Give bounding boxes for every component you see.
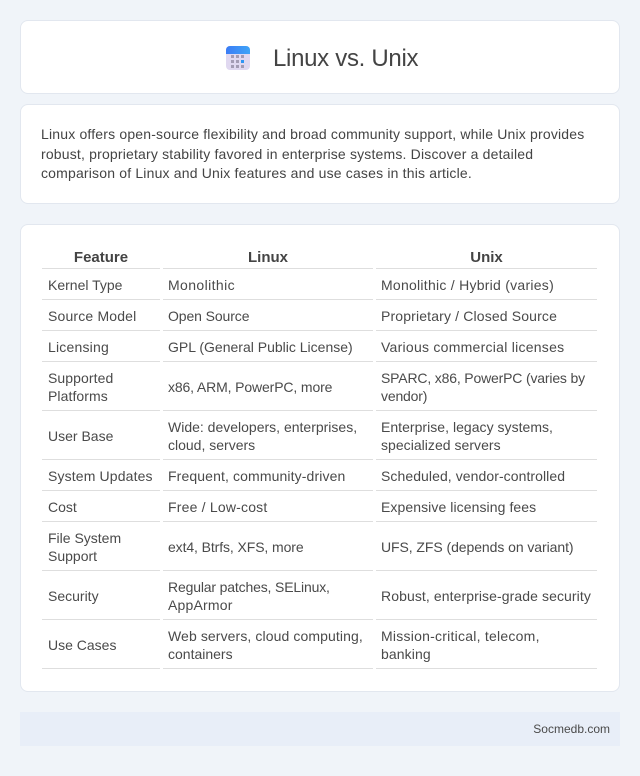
comparison table: Monolithic <box>168 277 235 293</box>
comparison table: Frequent, community-driven <box>168 468 345 484</box>
comparison table: Wide: developers, enterprises, <box>168 419 357 435</box>
comparison table: AppArmor <box>168 597 233 613</box>
footer credit: Socmedb.com <box>533 722 610 736</box>
comparison table: Platforms <box>48 388 108 404</box>
intro text: Linux offers open-source flexibility and broad community support, while Unix provides <box>41 126 584 142</box>
comparison table: Robust, enterprise-grade security <box>381 588 591 604</box>
comparison table: Enterprise, legacy systems, <box>381 419 553 435</box>
comparison table: containers <box>168 646 233 662</box>
comparison table: cloud, servers <box>168 437 255 453</box>
comparison table: Web servers, cloud computing, <box>168 628 363 644</box>
comparison table: Scheduled, vendor-controlled <box>381 468 565 484</box>
panel: comparison table card <box>20 224 620 692</box>
comparison table: Various commercial licenses <box>381 339 564 355</box>
comparison table: File System <box>48 530 121 546</box>
comparison table: Feature <box>74 249 128 266</box>
comparison table: Expensive licensing fees <box>381 499 536 515</box>
comparison table: Free / Low-cost <box>168 499 267 515</box>
comparison table: UFS, ZFS (depends on variant) <box>381 539 574 555</box>
title: Linux vs. Unix <box>273 45 418 72</box>
icon: calendar <box>226 46 250 70</box>
comparison table: Cost <box>48 499 77 515</box>
comparison table: Support <box>48 548 97 564</box>
comparison table: Source Model <box>48 308 136 324</box>
comparison table: vendor) <box>381 388 427 404</box>
panel: intro <box>20 104 620 204</box>
footer bar <box>20 712 620 746</box>
comparison table: Unix <box>470 249 503 266</box>
comparison table: Licensing <box>48 339 109 355</box>
comparison table: specialized servers <box>381 437 501 453</box>
intro text: comparison of Linux and Unix features and use cases in this article. <box>41 165 472 181</box>
comparison table: System Updates <box>48 468 153 484</box>
comparison table: Proprietary / Closed Source <box>381 308 557 324</box>
comparison table: SPARC, x86, PowerPC (varies by <box>381 370 585 386</box>
intro text: robust, proprietary stability favored in enterprise systems. Discover a detailed <box>41 146 533 162</box>
comparison table: x86, ARM, PowerPC, more <box>168 379 332 395</box>
comparison table: Linux <box>248 249 288 266</box>
comparison table: Open Source <box>168 308 249 324</box>
comparison table: Kernel Type <box>48 277 122 293</box>
comparison table: Monolithic / Hybrid (varies) <box>381 277 554 293</box>
comparison table: Use Cases <box>48 637 116 653</box>
comparison table: Regular patches, SELinux, <box>168 579 330 595</box>
comparison table: User Base <box>48 428 113 444</box>
comparison table: Mission-critical, telecom, <box>381 628 540 644</box>
panel: title card <box>20 20 620 94</box>
comparison table: Supported <box>48 370 113 386</box>
comparison table: Security <box>48 588 99 604</box>
comparison table: GPL (General Public License) <box>168 339 353 355</box>
intro text <box>41 126 584 181</box>
comparison table: banking <box>381 646 431 662</box>
comparison table: ext4, Btrfs, XFS, more <box>168 539 304 555</box>
